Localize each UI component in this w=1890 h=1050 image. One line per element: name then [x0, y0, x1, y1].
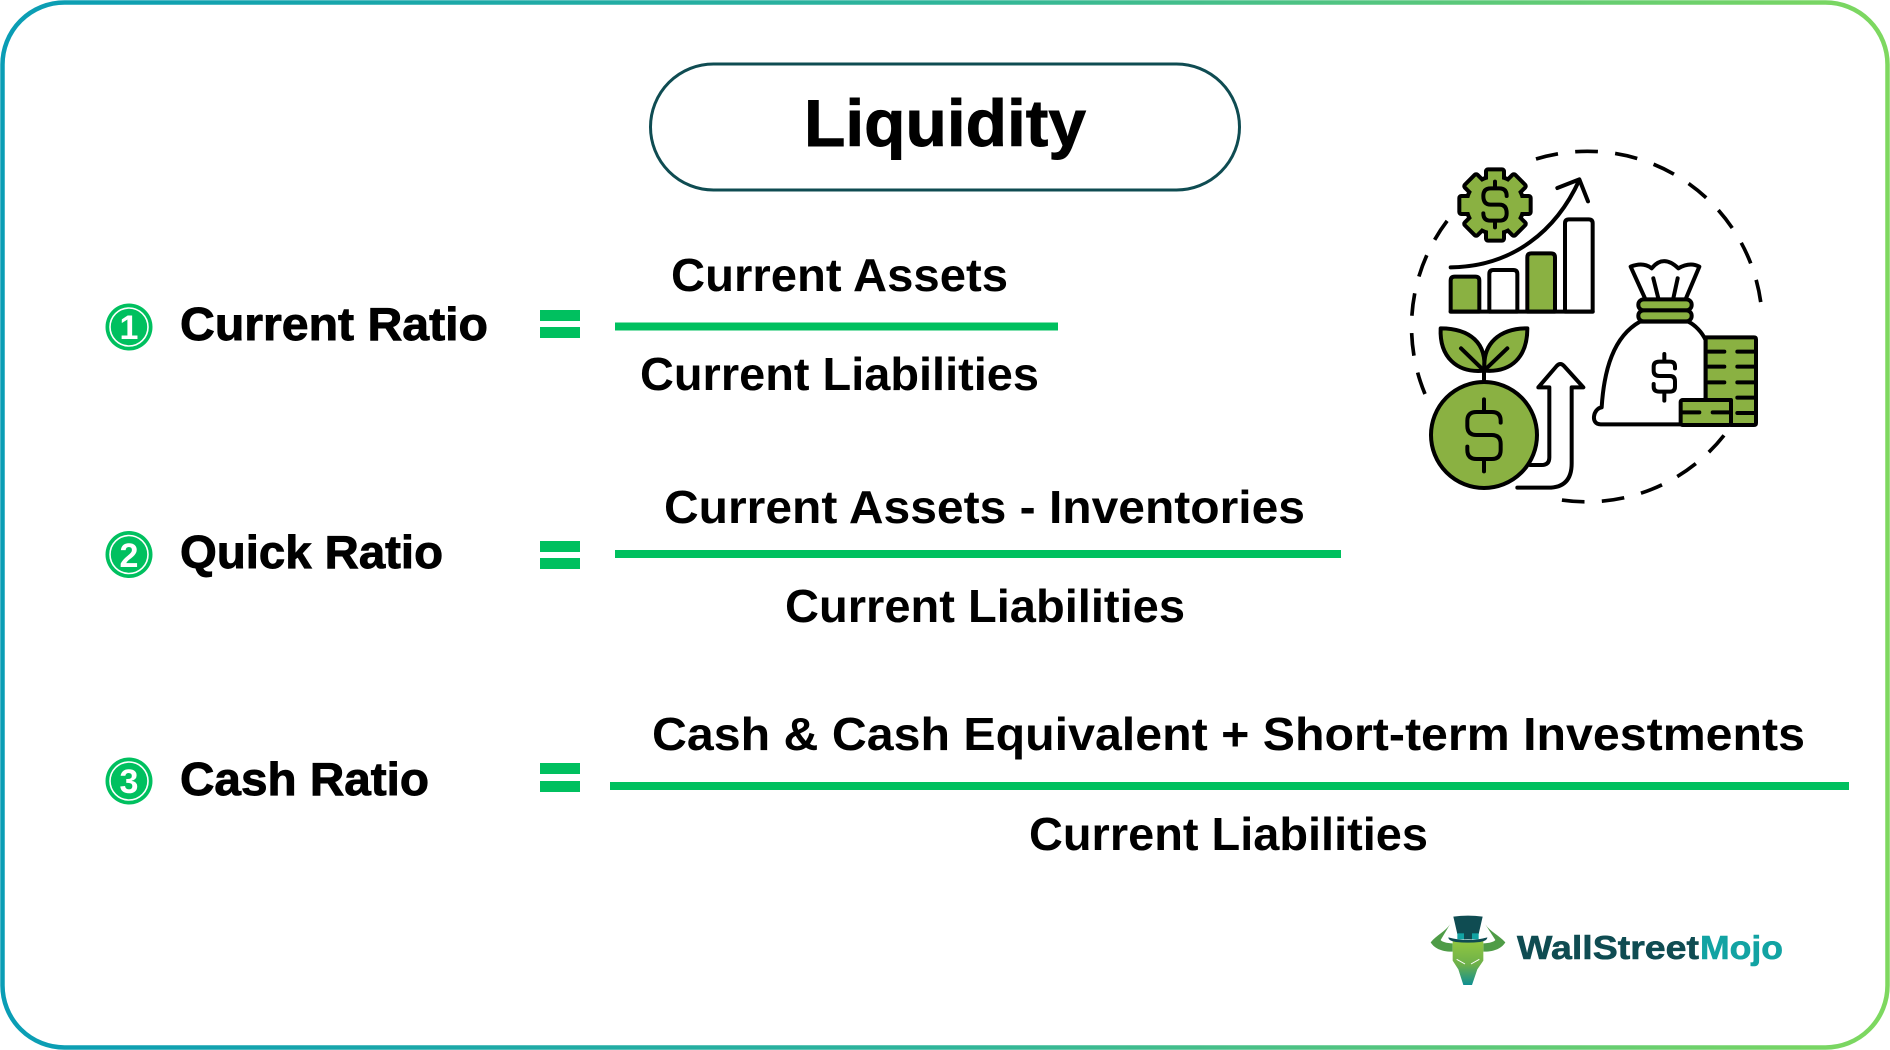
row: current ratio [106, 249, 1058, 400]
icon: money bag [1594, 261, 1706, 424]
badge 2: 2 [120, 537, 138, 575]
row: quick ratio [106, 481, 1341, 632]
badge 3: 3 [120, 763, 138, 801]
wordmark: WallStreet [1517, 929, 1699, 966]
formula: current ratio [615, 249, 1058, 400]
formula: current ratio: Current Assets [671, 249, 1008, 301]
badge 1 [106, 304, 152, 350]
icon: plant coin [1431, 328, 1537, 488]
formula: quick ratio: Current Liabilities [785, 580, 1185, 632]
formula: cash ratio: Current Liabilities [1029, 808, 1428, 860]
formula: current ratio: Current Liabilities [640, 348, 1039, 400]
badge 1: 1 [120, 309, 138, 347]
badge 3 [106, 758, 152, 804]
icon: up arrow [1517, 364, 1583, 488]
formula: quick ratio: Current Assets - Inventories [664, 481, 1305, 533]
label: quick ratio: Quick Ratio [180, 526, 443, 578]
equals sign [540, 541, 580, 569]
title pill: Liquidity [804, 86, 1086, 160]
formula: cash ratio [610, 708, 1849, 860]
dashed circle [1412, 151, 1761, 502]
icon: coin stacks [1681, 337, 1756, 425]
row: cash ratio [106, 708, 1849, 860]
formula: quick ratio [615, 481, 1341, 632]
icon: dollar gear [1459, 169, 1531, 241]
label: cash ratio: Cash Ratio [180, 753, 429, 805]
logo: WallStreetMojo [1431, 916, 1783, 985]
title pill [650, 64, 1240, 190]
illustration: finance growth icons [1412, 151, 1761, 502]
equals sign [540, 763, 580, 792]
wordmark: Mojo [1700, 929, 1783, 966]
badge 2 [106, 531, 152, 578]
equals sign [540, 310, 580, 338]
wordmark [1517, 929, 1783, 966]
icon: bull with top hat [1431, 916, 1505, 985]
formula: cash ratio: Cash & Cash Equivalent + Short-term Investments [652, 708, 1805, 760]
label: current ratio: Current Ratio [180, 298, 488, 350]
bar chart with rising arrow [1451, 179, 1593, 312]
